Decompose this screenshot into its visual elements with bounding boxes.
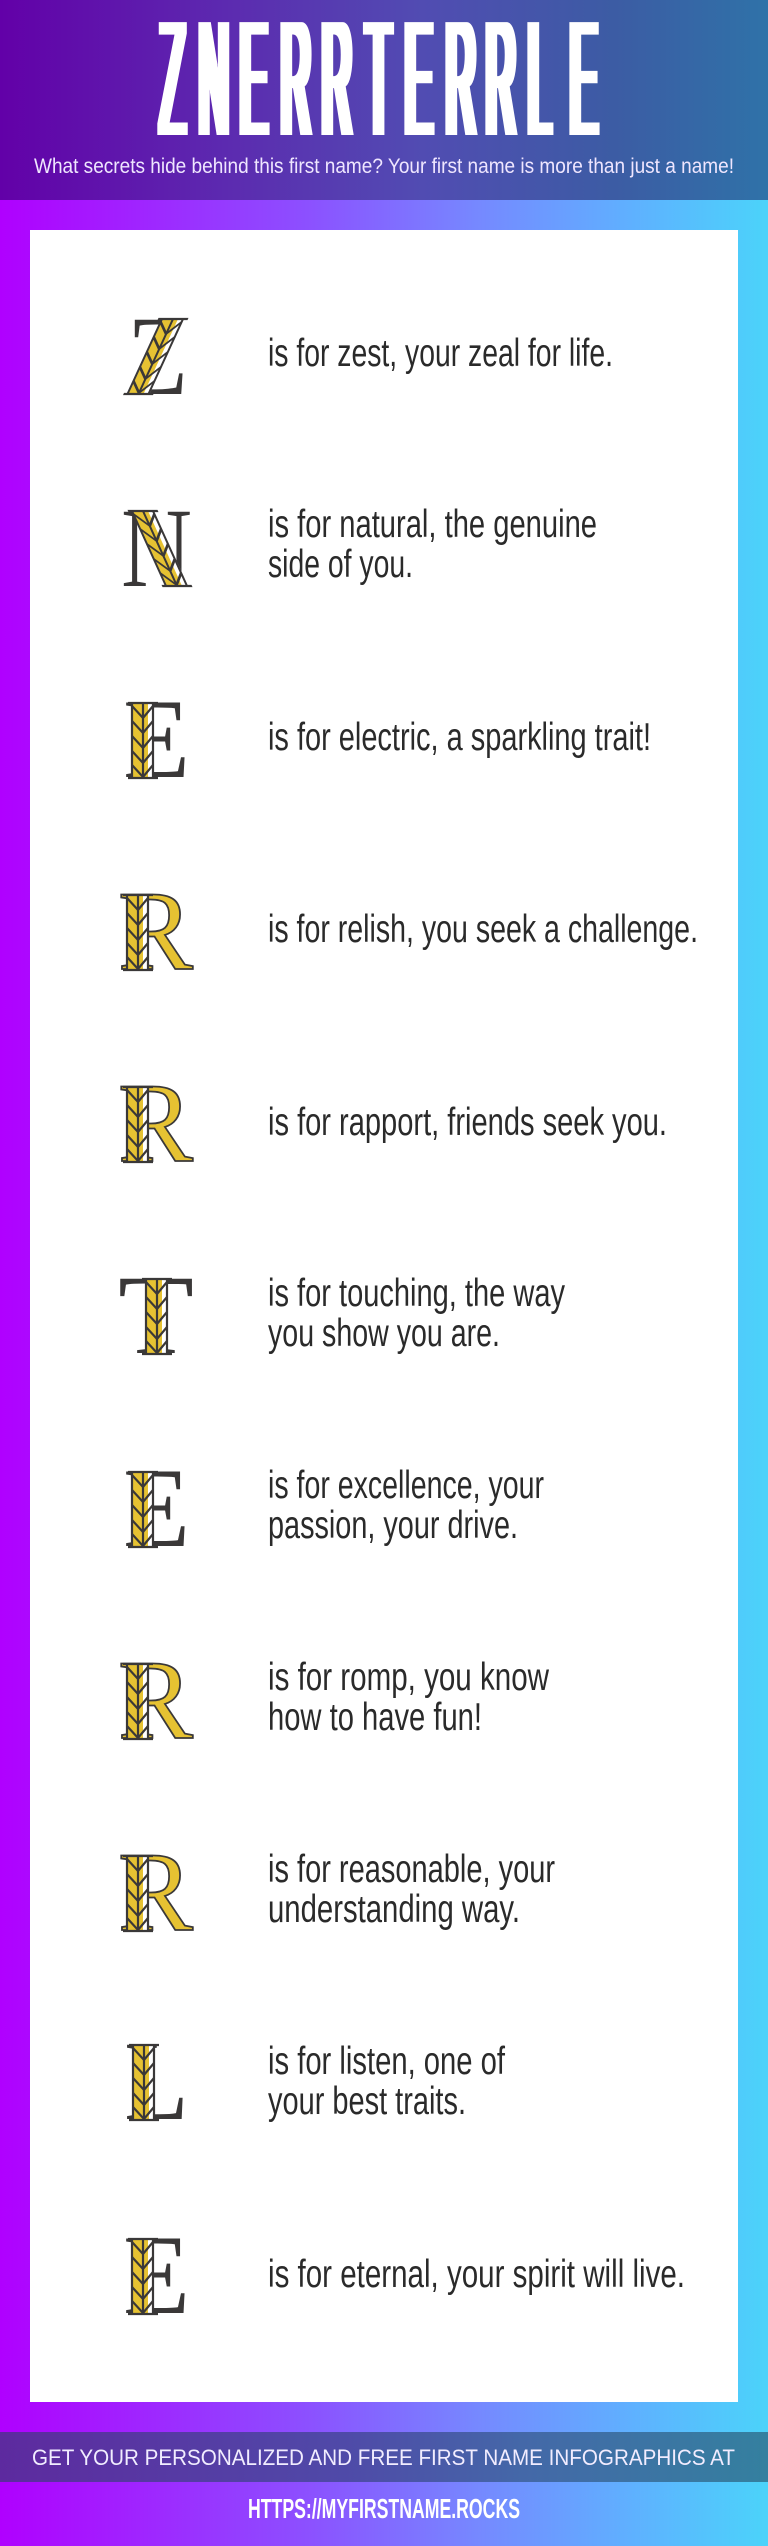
row: L: L [124, 2019, 189, 2144]
row: L: is for listen, one of [268, 2040, 505, 2083]
row: E [123, 677, 651, 802]
row: E: E [123, 677, 190, 802]
row: E [123, 1446, 544, 1571]
row: N: N [121, 486, 192, 611]
row: T: you show you are. [268, 1312, 500, 1355]
row: E: is for excellence, your [268, 1464, 544, 1507]
row: Z: Z [127, 294, 188, 419]
row: R: is for romp, you know [268, 1656, 550, 1699]
header band [0, 0, 768, 200]
row: R: R [118, 1638, 194, 1763]
row: E: E [123, 2213, 190, 2338]
row: E: passion, your drive. [268, 1504, 518, 1547]
row: E [123, 2213, 685, 2338]
footer band [0, 2432, 768, 2482]
row: T: is for touching, the way [268, 1272, 565, 1315]
row: N: side of you. [268, 543, 413, 586]
row: R: R [118, 869, 194, 994]
row: T: T [118, 1253, 194, 1378]
row: R [118, 869, 698, 994]
row: R: R [118, 1061, 194, 1186]
row: E: E [123, 1446, 190, 1571]
row: R: R [118, 1830, 194, 1955]
row: T [118, 1253, 565, 1378]
row: L [124, 2019, 505, 2144]
panel: white content card [30, 230, 738, 2402]
row: R: understanding way. [268, 1888, 520, 1931]
footer call to action: GET YOUR PERSONALIZED AND FREE FIRST NAME INFOGRAPHICS AT [32, 2445, 735, 2470]
footer url: HTTPS://MYFIRSTNAME.ROCKS [248, 2493, 520, 2524]
row: Z [124, 294, 613, 419]
row: R [118, 1638, 550, 1763]
row: R: how to have fun! [268, 1696, 482, 1739]
row: N: is for natural, the genuine [268, 503, 597, 546]
row: N [121, 486, 597, 611]
row: R [118, 1830, 555, 1955]
row: L: your best traits. [268, 2080, 466, 2123]
row: R: is for reasonable, your [268, 1848, 555, 1891]
row: R [118, 1061, 667, 1186]
row: Z: is for zest, your zeal for life. [268, 332, 613, 375]
